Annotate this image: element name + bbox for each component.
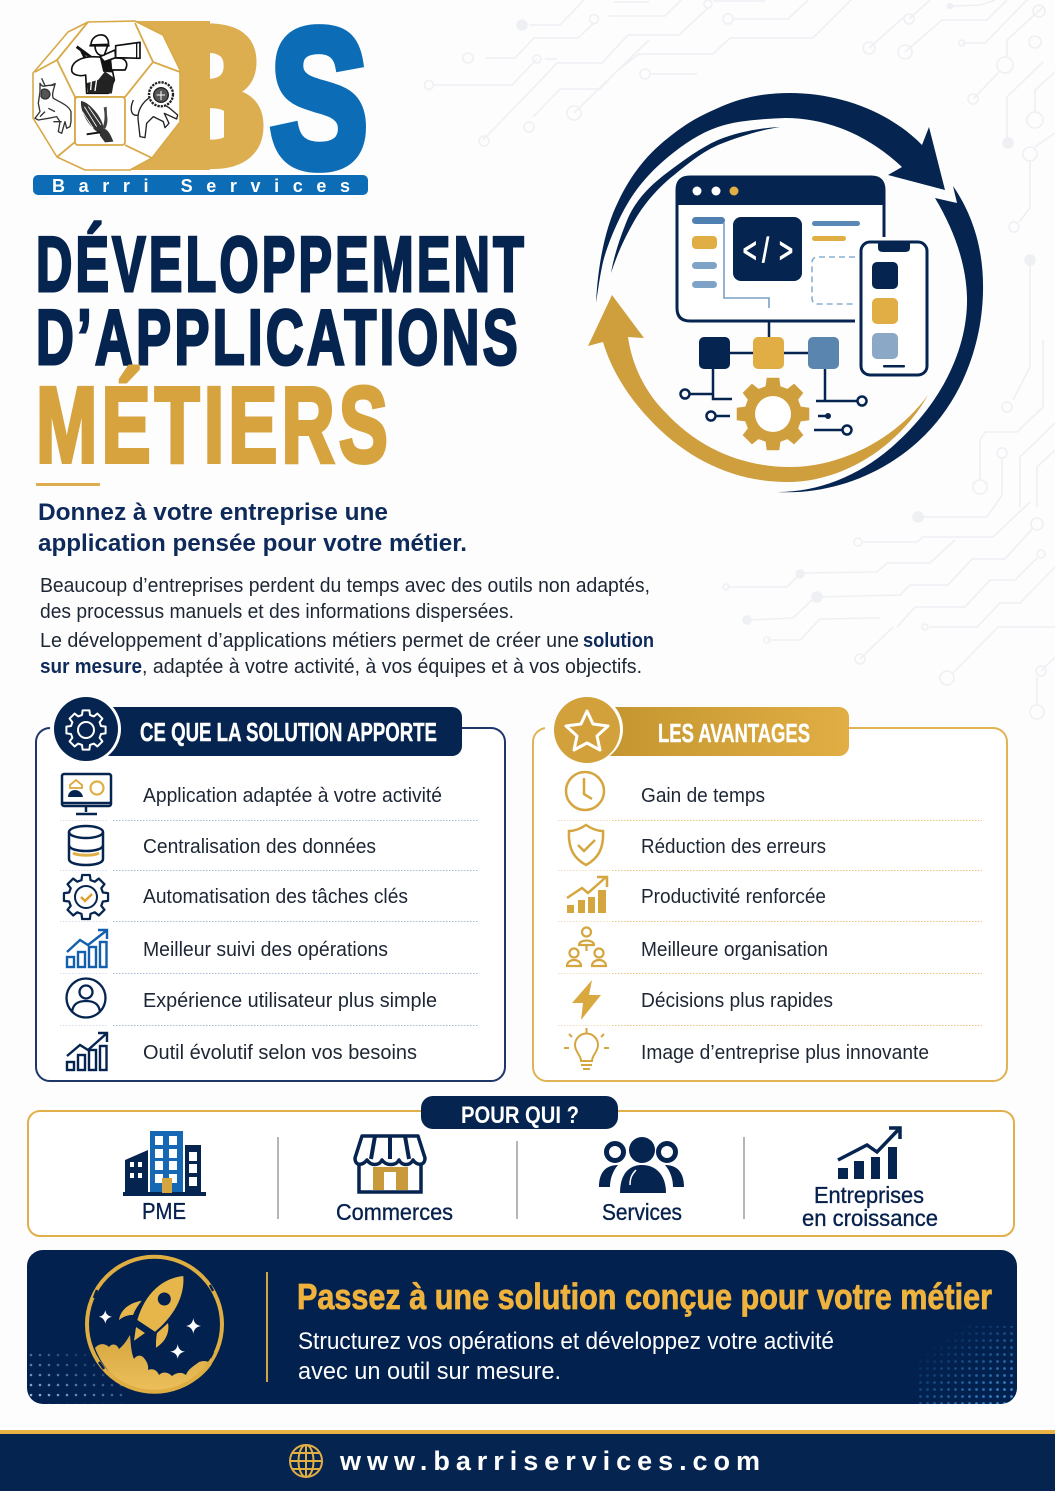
browser window — [677, 177, 884, 321]
subheading: Donnez à votre entreprise une — [38, 499, 388, 526]
item 4 — [67, 930, 388, 967]
eagle — [81, 101, 113, 142]
item 1: Gain de temps — [641, 785, 765, 807]
audience: PME: PME — [142, 1198, 186, 1224]
title line 1: DÉVELOPPEMENT — [36, 220, 527, 308]
item 6 — [67, 1033, 417, 1070]
banner text: avec un outil sur mesure. — [298, 1358, 561, 1385]
panel frame — [36, 728, 505, 1081]
item 5: Décisions plus rapides — [641, 990, 833, 1012]
audience: services — [599, 1137, 684, 1225]
intro paragraph: solution — [583, 630, 654, 652]
item 1 — [62, 774, 442, 814]
intro paragraph — [40, 575, 654, 678]
workflow nodes — [680, 322, 866, 434]
item 5 — [572, 980, 833, 1020]
logo tagline bar: Barri Services — [52, 176, 350, 196]
item 4: Meilleur suivi des opérations — [143, 939, 388, 961]
footer — [0, 1430, 1055, 1491]
panel: ce que la solution apporte — [36, 695, 505, 1081]
panel header: CE QUE LA SOLUTION APPORTE — [140, 717, 437, 747]
item 4 — [567, 928, 828, 966]
logo emblem ball — [33, 21, 180, 170]
item 2: Réduction des erreurs — [641, 836, 826, 858]
item 2 — [69, 826, 376, 865]
intro paragraph: Le développement d’applications métiers permet de créer une — [40, 630, 579, 652]
code symbol: </> — [743, 232, 793, 270]
code symbol — [733, 217, 802, 281]
subheading — [36, 483, 467, 557]
intro paragraph: sur mesure — [40, 656, 142, 678]
rocket emblem — [86, 1256, 223, 1393]
decorative circuit lines — [424, 0, 1055, 719]
item 1: Application adaptée à votre activité — [143, 785, 442, 807]
item 3: Automatisation des tâches clés — [143, 886, 408, 908]
banner background — [27, 1250, 1017, 1404]
intro paragraph: , adaptée à votre activité, à vos équipes et à vos objectifs. — [142, 656, 642, 678]
panel: pour qui — [28, 1096, 1014, 1236]
item 6: Image d’entreprise plus innovante — [641, 1042, 929, 1064]
navy lower arc — [777, 186, 983, 492]
panel frame — [533, 728, 1007, 1081]
audience: services: Services — [602, 1199, 682, 1225]
item 1 — [566, 772, 765, 810]
item 2 — [569, 825, 826, 865]
item 6 — [564, 1028, 929, 1069]
panel: les avantages — [533, 695, 1007, 1081]
panel header — [50, 695, 462, 763]
intro paragraph: Beaucoup d’entreprises perdent du temps avec des outils non adaptés, — [40, 575, 650, 597]
navy cycle arrow — [596, 93, 945, 303]
item 3 — [64, 875, 408, 919]
phone — [861, 242, 927, 375]
engineer with spyglass — [72, 35, 140, 93]
banner text — [298, 1328, 834, 1385]
navy inner swoosh — [611, 127, 780, 273]
panel frame — [28, 1111, 1014, 1236]
stars — [99, 1310, 201, 1359]
subheading: application pensée pour votre métier. — [38, 530, 467, 557]
audience: entreprises en croissance: Entreprises — [814, 1182, 924, 1208]
badge: pour qui: POUR QUI ? — [461, 1102, 579, 1129]
item 4: Meilleure organisation — [641, 939, 828, 961]
smoke cloud — [95, 1335, 212, 1392]
title line 2: D’APPLICATIONS — [36, 293, 521, 381]
item 5: Expérience utilisateur plus simple — [143, 990, 437, 1012]
gold cycle arrow — [588, 295, 928, 482]
logo: Barri Services — [33, 0, 368, 208]
badge: pour qui — [421, 1096, 618, 1129]
item 2: Centralisation des données — [143, 836, 376, 858]
intro paragraph: des processus manuels et des informations dispersées. — [40, 601, 514, 623]
audience: entreprises en croissance — [802, 1128, 938, 1231]
rocket body — [137, 1276, 183, 1332]
item 5 — [66, 978, 437, 1018]
gold gear — [737, 378, 809, 450]
lion — [131, 82, 178, 138]
item 3 — [567, 877, 826, 913]
panel header — [545, 695, 849, 763]
banner text: Structurez vos opérations et développez votre activité — [298, 1328, 834, 1355]
item 3: Productivité renforcée — [641, 886, 826, 908]
audience: PME — [123, 1131, 206, 1224]
audience: entreprises en croissance: en croissance — [802, 1205, 938, 1231]
main title — [36, 220, 527, 485]
audience: commerces: Commerces — [336, 1199, 453, 1225]
website: www.barriservices.com — [339, 1446, 760, 1476]
panel header: LES AVANTAGES — [658, 718, 810, 748]
globe icon — [290, 1445, 322, 1477]
item 6: Outil évolutif selon vos besoins — [143, 1042, 417, 1064]
title line 3: MÉTIERS — [36, 364, 392, 485]
audience: commerces — [336, 1136, 453, 1225]
hero illustration: app development cycle — [588, 93, 983, 492]
bull — [35, 78, 71, 133]
call to action banner — [27, 1250, 1017, 1404]
